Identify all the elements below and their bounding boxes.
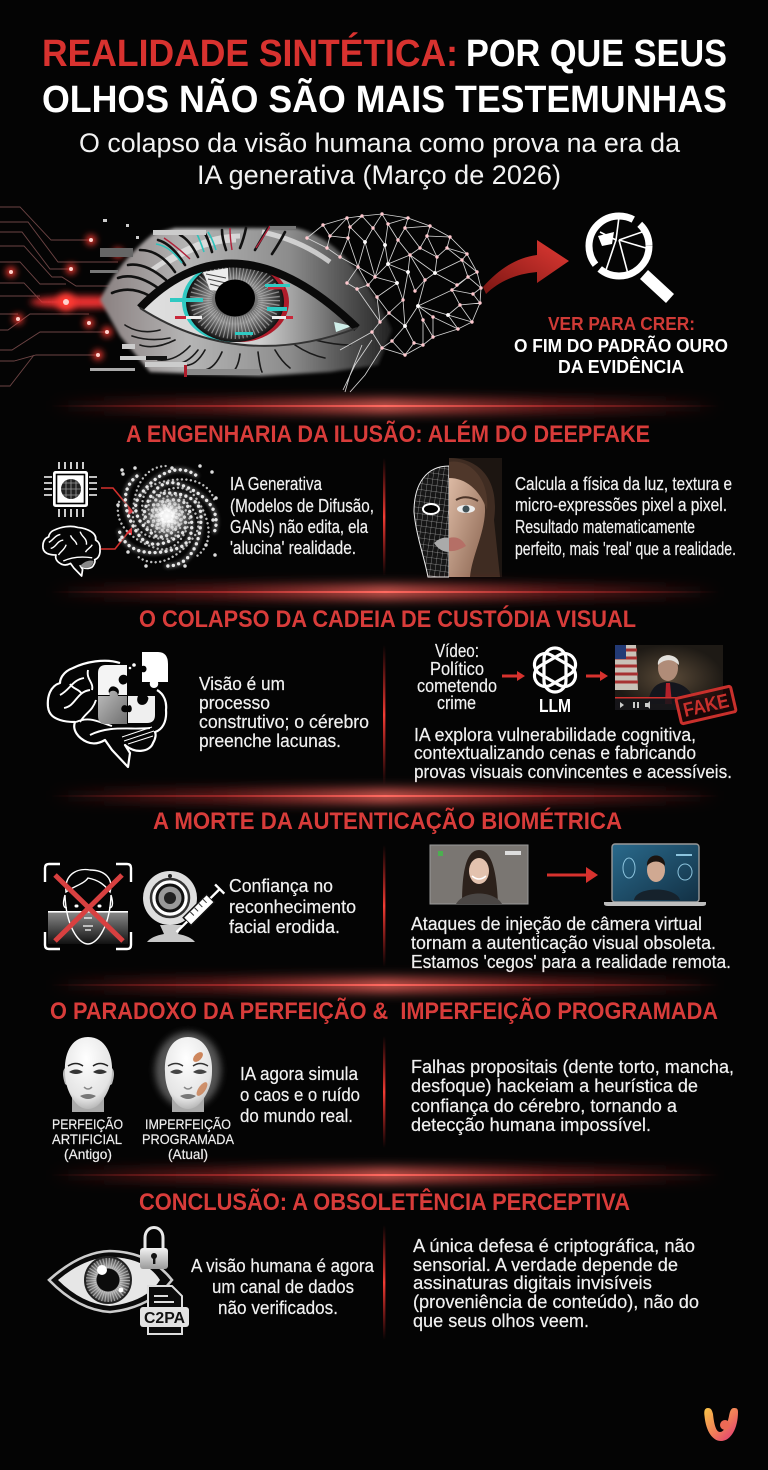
icon: crossed face scan [45, 864, 131, 949]
icon: chip [44, 462, 97, 517]
flow label: cometendo [417, 676, 497, 696]
panel: programmed flaws text: desfoque) hackeiam a heurística de [411, 1076, 698, 1096]
text block: um canal de dados [212, 1277, 354, 1297]
text block: do mundo real. [240, 1106, 353, 1126]
text block: processo [199, 693, 270, 713]
subtitle: O colapso da visão humana como prova na era da [79, 128, 681, 158]
panel: pixel-level rendering [414, 458, 736, 577]
flow label: Político [430, 659, 484, 679]
panel: generative AI [43, 456, 374, 576]
text block: o caos e o ruído [240, 1085, 360, 1105]
hero illustration: glitched eye [90, 219, 392, 377]
arrow [502, 671, 525, 681]
hero caption: VER PARA CRER: [548, 314, 695, 334]
panel: programmed flaws text [411, 1057, 734, 1135]
text block: construtivo; o cérebro [199, 712, 369, 732]
heading: o paradoxo da perfeição: O PARADOXO DA PERFEIÇÃO & IMPERFEIÇÃO PROGRAMADA [50, 997, 718, 1025]
arrow [586, 671, 608, 681]
icon: brain [43, 526, 100, 576]
title: POR QUE SEUS [466, 33, 727, 75]
flow label: crime [437, 693, 476, 713]
hero illustration: neural brain mesh [307, 214, 481, 392]
panel: cryptographic defense text [413, 1236, 699, 1331]
face labels: PERFEIÇÃO [52, 1116, 123, 1132]
text block [199, 674, 369, 751]
icon: logo [704, 1408, 738, 1441]
text block: IA Generativa [230, 474, 323, 494]
icon: brain with puzzle pieces [48, 652, 168, 767]
face labels [52, 1116, 235, 1162]
hero caption: DA EVIDÊNCIA [558, 356, 684, 377]
image: laptop with face id [604, 844, 706, 906]
text block [411, 914, 731, 972]
heading: conclusão: CONCLUSÃO: A OBSOLETÊNCIA PERCEPTIVA [139, 1188, 630, 1216]
text block: 'alucina' realidade. [230, 538, 356, 558]
text block: preenche lacunas. [199, 731, 341, 751]
face labels: (Atual) [168, 1146, 208, 1162]
text block: Resultado matematicamente [515, 517, 695, 537]
text block: IA explora vulnerabilidade cognitiva, [414, 725, 696, 745]
panel: cryptographic defense text: assinaturas digitais invisíveis [413, 1273, 652, 1293]
flow label [417, 641, 497, 713]
icon: LLM knot [530, 648, 580, 716]
face labels: ARTIFICIAL [52, 1131, 122, 1147]
title [42, 31, 727, 121]
panel: cryptographic defense text: que seus olhos veem. [413, 1311, 589, 1331]
text block: GANs) não edita, ela [230, 517, 369, 537]
text block [515, 474, 736, 559]
icon: webcam with syringe [143, 871, 224, 942]
face labels: (Antigo) [64, 1146, 112, 1162]
text block: A visão humana é agora [191, 1256, 375, 1276]
image: imperfect face [155, 1032, 221, 1112]
image: webcam feed [430, 845, 528, 904]
icon: LLM knot: LLM [539, 696, 571, 716]
subtitle: IA generativa (Março de 2026) [197, 160, 561, 190]
text block: Confiança no [229, 876, 333, 896]
panel: facial recognition eroded [45, 864, 356, 949]
text block: tornam a autenticação visual obsoleta. [411, 933, 716, 953]
icon: diffusion spiral [109, 456, 225, 576]
connectors [101, 488, 132, 549]
text block: Ataques de injeção de câmera virtual [411, 914, 702, 934]
text block: (Modelos de Difusão, [230, 496, 374, 516]
icon: eye with lock and C2PA document: C2PA [144, 1310, 185, 1327]
text block: Estamos 'cegos' para a realidade remota. [411, 952, 731, 972]
text block: IA agora simula [240, 1064, 359, 1084]
panel: programmed flaws text: confiança do cérebro, tornando a [411, 1096, 678, 1116]
arrow [547, 867, 598, 883]
icon: eye with lock and C2PA document [49, 1228, 189, 1334]
arrow [483, 240, 569, 294]
text block [414, 725, 732, 782]
panel: perfection vs imperfection [52, 1032, 360, 1162]
image: fake politician video [615, 645, 723, 710]
panel: cryptographic defense text: (proveniência de conteúdo), não do [413, 1292, 699, 1312]
text block: provas visuais convincentes e acessíveis. [414, 762, 732, 782]
image: perfect face [63, 1037, 114, 1112]
panel: virtual camera injection [411, 844, 731, 972]
face labels: PROGRAMADA [142, 1131, 235, 1147]
title: OLHOS NÃO SÃO MAIS TESTEMUNHAS [42, 77, 727, 121]
hero illustration: circuit lines [0, 207, 140, 386]
heading: a morte da autenticação: A MORTE DA AUTENTICAÇÃO BIOMÉTRICA [153, 807, 622, 835]
text block: não verificados. [218, 1298, 338, 1318]
subtitle [79, 128, 681, 190]
panel: programmed flaws text: detecção humana impossível. [411, 1115, 651, 1135]
title: REALIDADE SINTÉTICA: [42, 31, 458, 75]
panel: constructive vision [48, 652, 369, 767]
hero caption: O FIM DO PADRÃO OURO [514, 335, 728, 356]
text block: contextualizando cenas e fabricando [414, 743, 696, 763]
panel: fabricated evidence [414, 641, 736, 782]
panel: programmed flaws text: Falhas propositais (dente torto, mancha, [411, 1057, 734, 1077]
stamp: fake: FAKE [681, 690, 731, 722]
text block [191, 1256, 375, 1318]
text block [230, 474, 374, 558]
hero caption [514, 314, 728, 377]
heading: a engenharia da ilusão: A ENGENHARIA DA ILUSÃO: ALÉM DO DEEPFAKE [126, 420, 650, 448]
text block: Calcula a física da luz, textura e [515, 474, 732, 494]
face labels: IMPERFEIÇÃO [145, 1116, 231, 1132]
panel: unverified data channel [49, 1228, 375, 1334]
panel: cryptographic defense text: A única defesa é criptográfica, não [413, 1236, 695, 1256]
text block [229, 876, 356, 937]
text block: facial erodida. [229, 917, 340, 937]
panel: cryptographic defense text: sensorial. A verdade depende de [413, 1255, 678, 1275]
text block [240, 1064, 360, 1126]
heading: o colapso da cadeia: O COLAPSO DA CADEIA DE CUSTÓDIA VISUAL [139, 605, 636, 633]
icon: cracked magnifying glass [589, 216, 674, 303]
image: half wireframe face [414, 458, 502, 577]
flow label: Vídeo: [435, 641, 479, 661]
text block: reconhecimento [229, 897, 356, 917]
text block: Visão é um [199, 674, 285, 694]
text block: micro-expressões pixel a pixel. [515, 495, 727, 515]
